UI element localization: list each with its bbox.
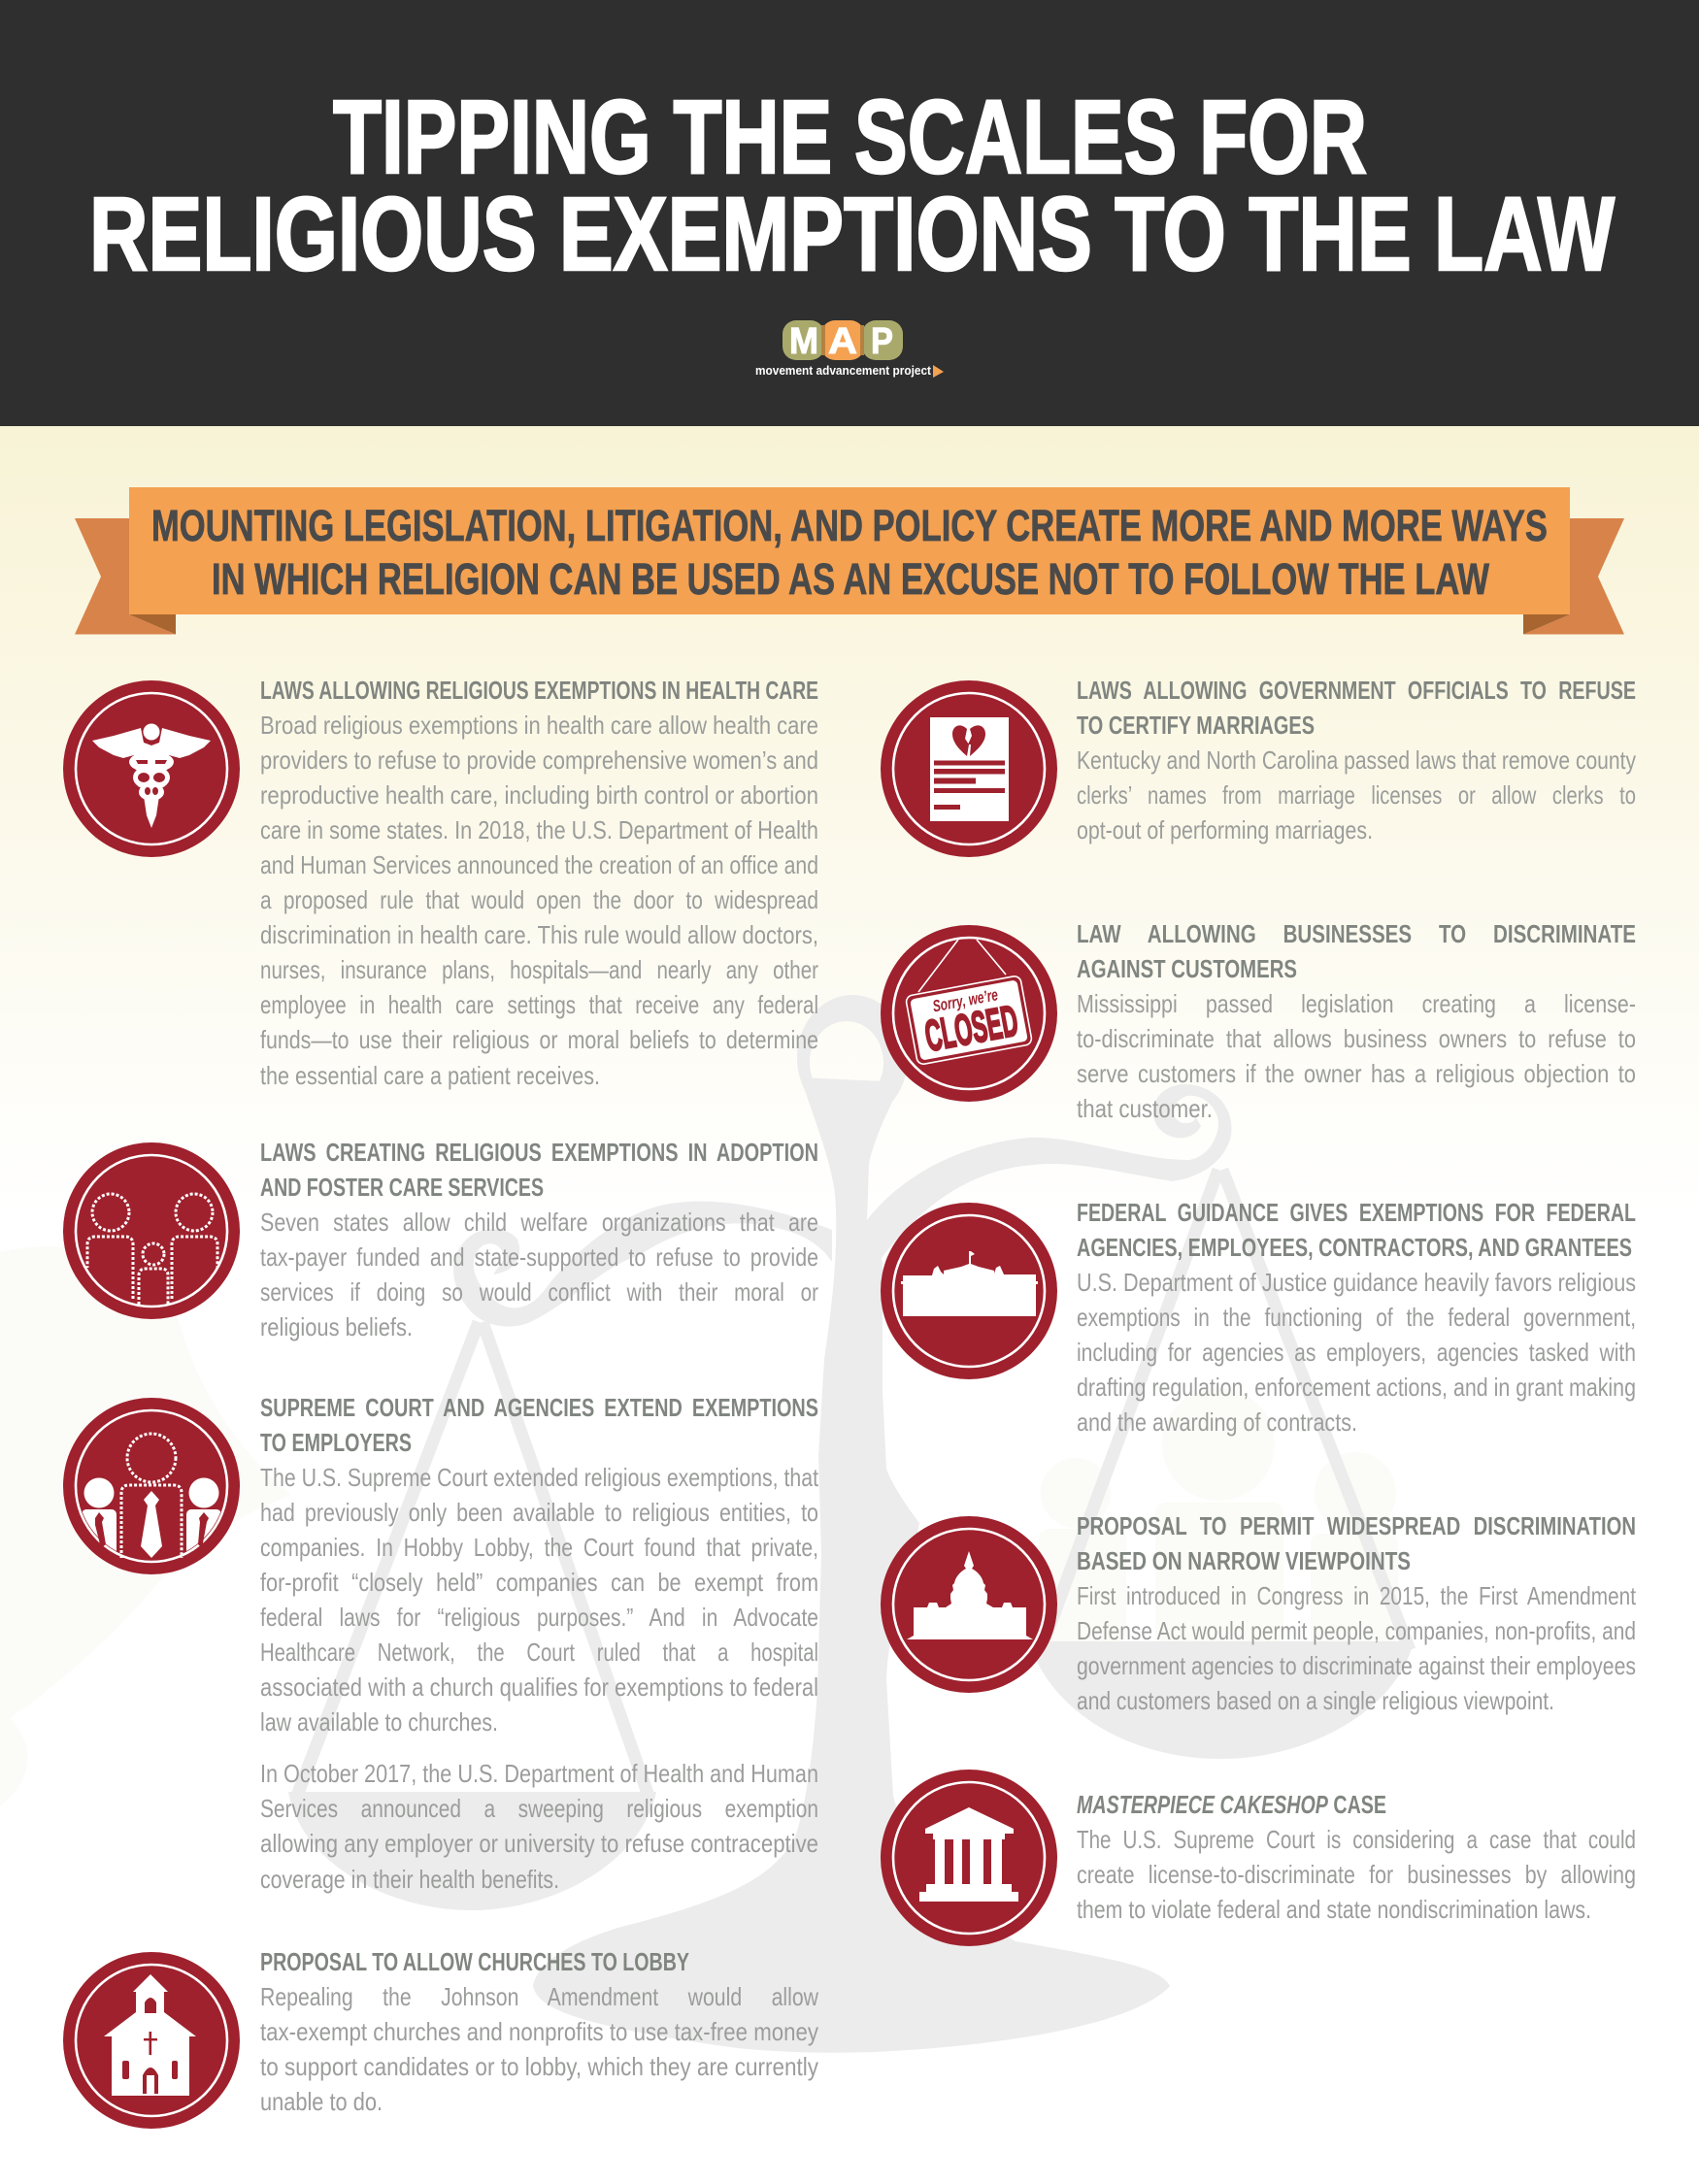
section: businesses xyxy=(1077,919,1636,1123)
section: adoption and foster care xyxy=(260,1138,818,1341)
section: adoption and foster care: tax-payer funded and state-supported to refuse to provide xyxy=(260,1242,818,1272)
section: widespread discrimination proposal: BASED ON NARROW VIEWPOINTS xyxy=(1077,1546,1411,1575)
section: churches lobby xyxy=(260,1947,818,2116)
section: employers: TO EMPLOYERS xyxy=(260,1428,412,1457)
MAP logo xyxy=(755,320,944,378)
section: businesses: that customer. xyxy=(1077,1094,1213,1123)
section: health care xyxy=(260,676,818,1090)
section: widespread discrimination proposal: and customers based on a single religious viewpoint. xyxy=(1077,1686,1554,1715)
section: health care: LAWS ALLOWING RELIGIOUS EXEMPTIONS IN HEALTH CARE xyxy=(260,676,818,705)
section: employers: associated with a church qualifies for exemptions to federal xyxy=(260,1672,818,1702)
section: employers: coverage in their health benefits. xyxy=(260,1865,559,1894)
title: TIPPING THE SCALES FOR xyxy=(333,78,1367,195)
icon: family xyxy=(63,1142,240,1319)
icon: courthouse xyxy=(881,1770,1057,1946)
icon: closed sign: CLOSED xyxy=(921,995,1021,1061)
section: adoption and foster care: Seven states allow child welfare organizations that are xyxy=(260,1208,818,1237)
section: businesses: AGAINST CUSTOMERS xyxy=(1077,954,1297,983)
icon: caduceus xyxy=(63,680,240,857)
icon: white house xyxy=(881,1203,1057,1379)
section: health care: a proposed rule that would open the door to widespread xyxy=(260,885,818,914)
section: churches lobby: Repealing the Johnson Amendment would allow xyxy=(260,1982,818,2011)
section: health care: funds—to use their religious or moral beliefs to determine xyxy=(260,1025,818,1054)
section: employers: Services announced a sweeping religious exemption xyxy=(260,1794,818,1823)
banner ribbon xyxy=(75,487,1624,635)
icon: closed sign: Sorry, we’re xyxy=(931,985,999,1015)
section: employers: law available to churches. xyxy=(260,1707,498,1737)
cream background xyxy=(0,426,1699,1213)
section: adoption and foster care: services if doing so would conflict with their moral or xyxy=(260,1277,818,1307)
icon: closed sign xyxy=(881,925,1057,1102)
section: employers: SUPREME COURT AND AGENCIES EXTEND EXEMPTIONS xyxy=(260,1393,818,1422)
section: Masterpiece Cakeshop: MASTERPIECE CAKESHOP CASE xyxy=(1077,1790,1386,1819)
section: health care: employee in health care settings that receive any federal xyxy=(260,990,818,1019)
background scale watermark xyxy=(0,995,1414,2053)
section: Masterpiece Cakeshop: them to violate federal and state nondiscrimination laws. xyxy=(1077,1895,1591,1924)
MAP logo: A xyxy=(828,321,857,362)
section: health care: Broad religious exemptions in health care allow health care xyxy=(260,711,818,740)
section: health care: providers to refuse to provide comprehensive women’s and xyxy=(260,745,818,775)
title xyxy=(89,78,1615,292)
section: federal guidance xyxy=(1077,1198,1636,1437)
section: adoption and foster care: LAWS CREATING RELIGIOUS EXEMPTIONS IN ADOPTION xyxy=(260,1138,818,1167)
icon: broken heart certificate xyxy=(881,680,1057,857)
section: health care: nurses, insurance plans, hospitals—and nearly any other xyxy=(260,955,818,984)
section: churches lobby: unable to do. xyxy=(260,2087,383,2116)
section: widespread discrimination proposal xyxy=(1077,1511,1637,1715)
section: health care: care in some states. In 2018, the U.S. Department of Health xyxy=(260,815,818,844)
section: Masterpiece Cakeshop xyxy=(1077,1790,1636,1924)
section: employers: In October 2017, the U.S. Department of Health and Human xyxy=(260,1759,818,1788)
section: churches lobby: tax-exempt churches and nonprofits to use tax-free money xyxy=(260,2017,818,2046)
section: health care: the essential care a patient receives. xyxy=(260,1061,600,1090)
MAP logo: M xyxy=(789,321,818,362)
section: employers: had previously only been available to religious entities, to xyxy=(260,1498,818,1527)
section: government officials xyxy=(1077,676,1636,844)
section: federal guidance: and the awarding of contracts. xyxy=(1077,1407,1357,1437)
section: employers: companies. In Hobby Lobby, the Court found that private, xyxy=(260,1533,818,1562)
section: employers: federal laws for “religious purposes.” And in Advocate xyxy=(260,1603,818,1632)
section: employers: for-profit “closely held” companies can be exempt from xyxy=(260,1568,818,1597)
section: health care: discrimination in health care. This rule would allow doctors, xyxy=(260,920,818,949)
icon: church xyxy=(63,1952,240,2129)
section: employers: The U.S. Supreme Court extended religious exemptions, that xyxy=(260,1463,819,1492)
icon: capitol xyxy=(881,1516,1057,1693)
section: adoption and foster care: religious beliefs. xyxy=(260,1312,413,1341)
header band xyxy=(0,0,1699,426)
section: government officials: opt-out of performing marriages. xyxy=(1077,815,1373,844)
section: churches lobby: to support candidates or to lobby, which they are currently xyxy=(260,2052,818,2081)
section: employers xyxy=(260,1393,819,1894)
section: government officials: TO CERTIFY MARRIAGES xyxy=(1077,711,1315,740)
icon: employers xyxy=(63,1398,240,1574)
section: adoption and foster care: AND FOSTER CARE SERVICES xyxy=(260,1173,544,1202)
section: health care: reproductive health care, including birth control or abortion xyxy=(260,780,818,810)
section: health care: and Human Services announced the creation of an office and xyxy=(260,850,818,879)
MAP logo: P xyxy=(871,321,893,362)
MAP logo: movement advancement project xyxy=(755,363,932,378)
section: employers: allowing any employer or university to refuse contraceptive xyxy=(260,1829,818,1858)
section: churches lobby: PROPOSAL TO ALLOW CHURCHES TO LOBBY xyxy=(260,1947,689,1976)
section: employers: Healthcare Network, the Court ruled that a hospital xyxy=(260,1638,818,1667)
